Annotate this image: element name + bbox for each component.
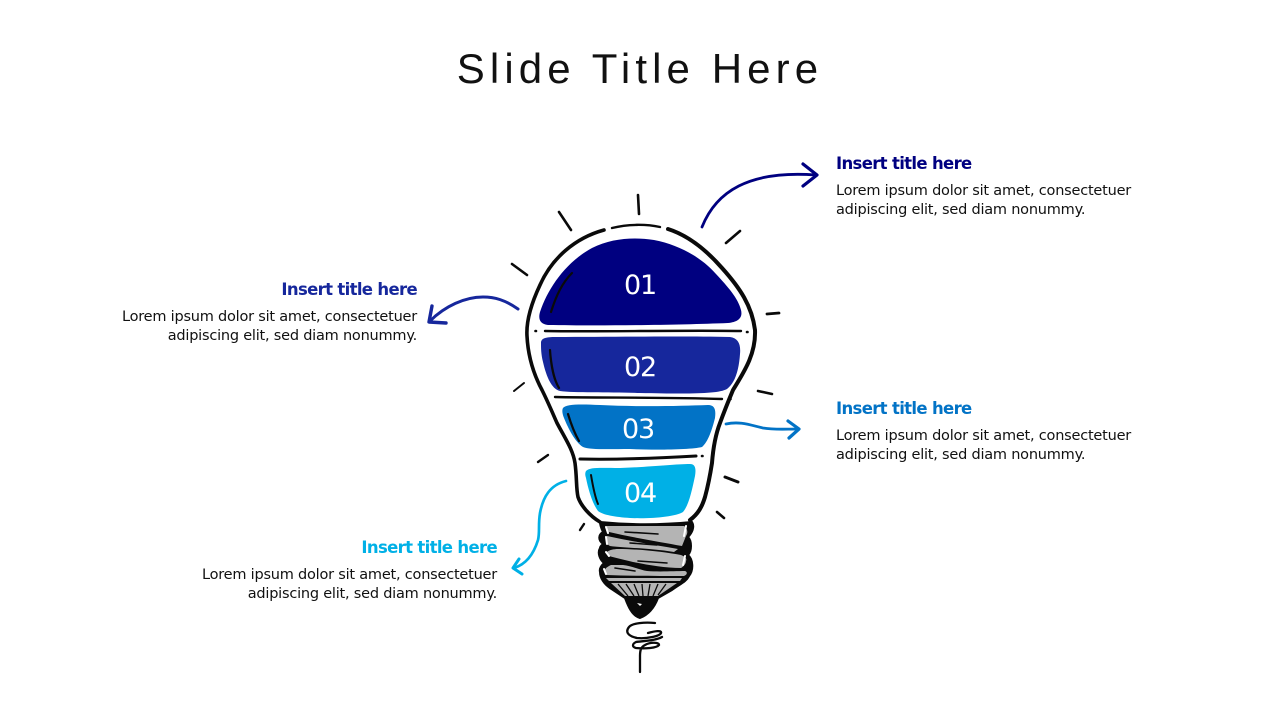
text: Lorem ipsum dolor sit amet, consectetuer: [836, 183, 1131, 199]
segment 02 fill: 02: [624, 352, 656, 383]
segment 01 fill: 01: [624, 270, 656, 301]
text block: item 04: [202, 538, 498, 602]
arrow to item 01: [702, 164, 817, 227]
text: Lorem ipsum dolor sit amet, consectetuer: [202, 567, 497, 583]
text: Insert title here: [836, 154, 972, 173]
arrow to item 03: [726, 421, 799, 438]
segment 04 fill: [585, 464, 695, 518]
text: Lorem ipsum dolor sit amet, consectetuer: [836, 428, 1131, 444]
text: Insert title here: [361, 538, 497, 557]
segment 01 fill: [539, 239, 741, 325]
text: Insert title here: [836, 399, 972, 418]
bulb filament coil: [627, 623, 662, 672]
text: Lorem ipsum dolor sit amet, consectetuer: [122, 309, 417, 325]
text block: item 01: [836, 154, 1132, 218]
arrow to item 02: [429, 297, 518, 323]
arrow to item 04: [513, 481, 566, 574]
text block: item 02: [122, 280, 418, 344]
light rays: [512, 195, 779, 530]
text: Insert title here: [281, 280, 417, 299]
text block: item 03: [836, 399, 1132, 463]
segment 04 fill: 04: [624, 478, 656, 509]
bulb screw base: [599, 522, 693, 618]
segment 02 fill: [541, 337, 740, 394]
text: adipiscing elit, sed diam nonummy.: [836, 202, 1085, 218]
bulb glass outline: [527, 225, 755, 522]
text: adipiscing elit, sed diam nonummy.: [836, 447, 1085, 463]
segment 03 fill: [562, 404, 715, 450]
title: Slide Title Here: [457, 45, 823, 92]
text: adipiscing elit, sed diam nonummy.: [168, 328, 417, 344]
text: adipiscing elit, sed diam nonummy.: [248, 586, 497, 602]
segment 03 fill: 03: [622, 414, 654, 445]
